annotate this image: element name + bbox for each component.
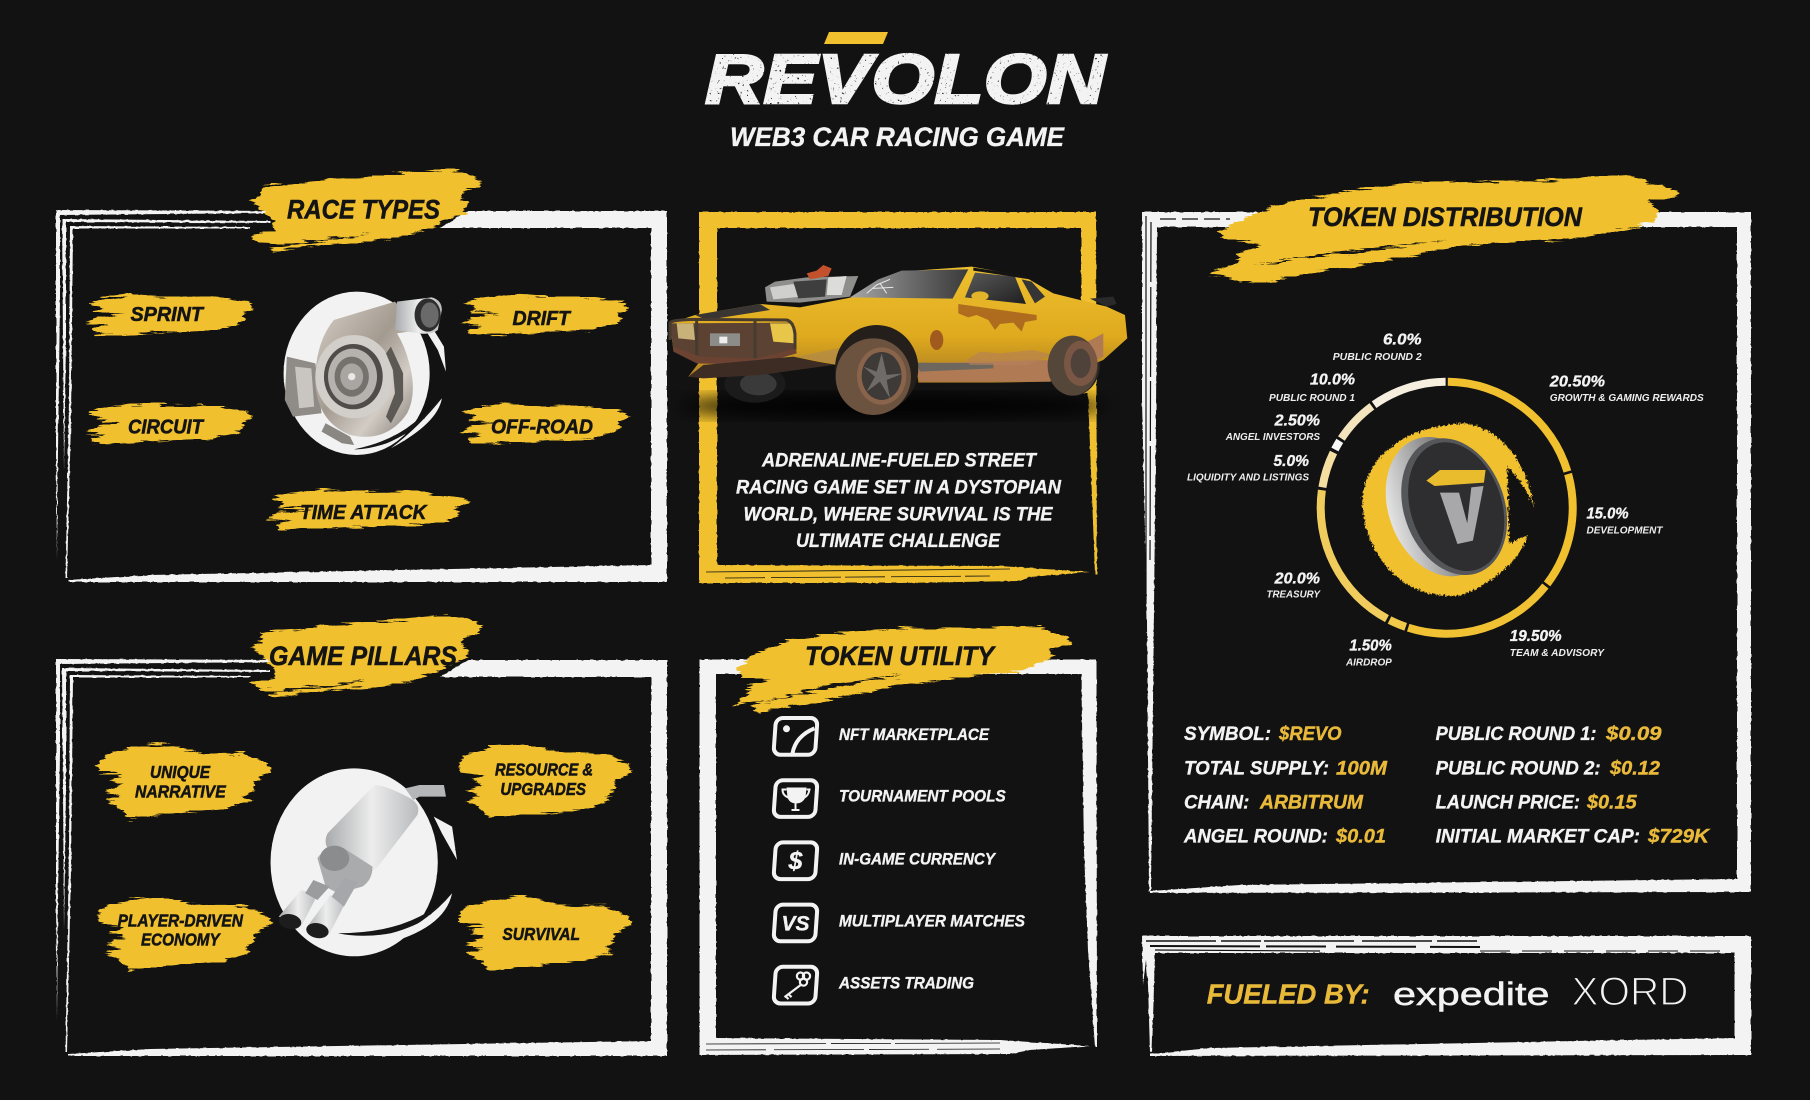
panel: game overview with car <box>670 212 1127 583</box>
pillar: resource and upgrades: UPGRADES <box>500 779 586 799</box>
overview text: ULTIMATE CHALLENGE <box>796 530 1001 552</box>
stat: angel round: ANGEL ROUND: <box>1183 826 1328 848</box>
utility: assets trading: ASSETS TRADING <box>838 974 974 992</box>
stat: chain <box>1184 791 1364 813</box>
label: liquidity and listings: 5.0% <box>1274 453 1309 470</box>
overview text: WORLD, WHERE SURVIVAL IS THE <box>744 504 1053 526</box>
image: exhaust muffler <box>271 768 457 956</box>
logo: expedite: expedite <box>1393 976 1550 1012</box>
donut chart <box>1321 382 1573 634</box>
label: public round 1: PUBLIC ROUND 1 <box>1269 392 1355 404</box>
race types frame <box>56 210 667 582</box>
logo: xord: XORD <box>1572 970 1688 1014</box>
top frame scratches <box>1146 941 1730 951</box>
utility: in-game currency: IN-GAME CURRENCY <box>839 850 997 868</box>
token distribution frame <box>1142 212 1751 893</box>
item: drift <box>460 294 629 335</box>
header: logo and subtitle <box>705 32 1107 152</box>
panel: game pillars <box>56 614 667 1056</box>
item: circuit <box>84 403 253 444</box>
fueled by frame <box>1142 936 1751 1056</box>
pillar: player-driven economy: PLAYER-DRIVEN <box>118 911 243 931</box>
utility: assets trading <box>773 967 974 1004</box>
stat: launch price: $0.15 <box>1586 791 1638 813</box>
item: drift: DRIFT <box>512 308 572 330</box>
utility: multiplayer matches <box>773 905 1025 941</box>
pillar: player-driven economy <box>97 896 271 970</box>
label: public round 2: PUBLIC ROUND 2 <box>1333 351 1422 363</box>
label: development: 15.0% <box>1586 505 1629 522</box>
item: off-road <box>460 403 629 444</box>
coin illustration <box>1362 423 1534 596</box>
icon: versus <box>773 905 818 941</box>
panel: token utility <box>700 627 1097 1055</box>
pillar: player-driven economy: ECONOMY <box>141 930 221 950</box>
game pillars heading brush <box>250 614 483 698</box>
stat: public round 2: $0.12 <box>1609 757 1660 779</box>
item: time attack <box>266 489 469 530</box>
stat: chain: ARBITRUM <box>1259 791 1364 813</box>
stat: public round 1: PUBLIC ROUND 1: <box>1436 723 1596 745</box>
stat: total supply: 100M <box>1336 757 1388 779</box>
stat: symbol: $REVO <box>1278 723 1342 745</box>
overview text <box>736 450 1062 552</box>
label: team and advisory <box>1510 628 1605 659</box>
label: treasury: TREASURY <box>1266 589 1321 601</box>
token utility frame <box>700 660 1097 1055</box>
panel: token distribution <box>1142 175 1751 893</box>
label: public round 1 <box>1269 372 1355 404</box>
logo accent bar <box>824 32 888 44</box>
label: public round 2 <box>1333 332 1422 363</box>
icon: versus: VS <box>781 912 810 935</box>
image: turbocharger <box>284 292 446 455</box>
pillar: resource and upgrades: RESOURCE & <box>495 760 593 780</box>
game pillars heading: GAME PILLARS <box>269 641 457 671</box>
donut labels <box>1187 332 1704 669</box>
label: angel investors: ANGEL INVESTORS <box>1225 431 1320 443</box>
label: team and advisory: TEAM & ADVISORY <box>1510 647 1605 659</box>
utility: nft marketplace: NFT MARKETPLACE <box>839 726 990 744</box>
yellow frame <box>699 212 1097 583</box>
race types heading brush <box>250 168 483 252</box>
label: liquidity and listings <box>1187 453 1309 484</box>
label: development <box>1586 505 1664 536</box>
car shadow <box>678 393 1108 419</box>
label: growth and gaming rewards <box>1549 374 1704 404</box>
label: development: DEVELOPMENT <box>1586 524 1664 536</box>
stat: chain: CHAIN: <box>1184 791 1249 813</box>
bottom frame scratches <box>706 1043 1000 1050</box>
pillar: unique narrative: NARRATIVE <box>135 782 227 802</box>
subtitle: WEB3 CAR RACING GAME <box>730 122 1065 152</box>
stat: initial market cap: INITIAL MARKET CAP: <box>1436 826 1640 848</box>
icon: dollar <box>773 842 818 879</box>
pillar: survival: SURVIVAL <box>502 924 580 944</box>
overview text: ADRENALINE-FUELED STREET <box>761 450 1038 472</box>
left frame scratches <box>1146 216 1230 600</box>
item: sprint: SPRINT <box>130 304 205 326</box>
label: airdrop <box>1345 638 1393 669</box>
stat: launch price: LAUNCH PRICE: <box>1436 791 1580 813</box>
label: airdrop: 1.50% <box>1349 638 1392 655</box>
label: growth and gaming rewards: GROWTH & GAMING REWARDS <box>1550 392 1704 404</box>
icon: dollar: $ <box>788 848 804 876</box>
panel: race types <box>56 168 667 582</box>
game pillars frame <box>56 659 667 1056</box>
label: liquidity and listings: LIQUIDITY AND LISTINGS <box>1187 472 1309 484</box>
utility: nft marketplace <box>773 718 990 755</box>
utility: multiplayer matches: MULTIPLAYER MATCHES <box>839 913 1025 931</box>
token utility heading: TOKEN UTILITY <box>805 641 997 671</box>
utility: in-game currency <box>773 842 997 879</box>
stat: initial market cap: $729K <box>1647 826 1711 848</box>
logo wordmark: REVOLON <box>705 40 1107 118</box>
label: angel investors: 2.50% <box>1274 413 1320 430</box>
label: growth and gaming rewards: 20.50% <box>1549 374 1605 391</box>
icon: image <box>773 718 818 755</box>
panel: fueled by <box>1142 936 1751 1056</box>
fueled by heading: FUELED BY: <box>1207 978 1370 1009</box>
token utility heading brush <box>732 627 1072 712</box>
label: public round 2: 6.0% <box>1383 332 1422 348</box>
label: airdrop: AIRDROP <box>1345 657 1393 669</box>
pillar: resource and upgrades <box>458 744 632 818</box>
icon: trophy <box>773 780 818 817</box>
bottom frame scratches <box>706 569 1010 578</box>
stat: angel round: $0.01 <box>1335 826 1386 848</box>
utility: tournament pools <box>773 780 1006 817</box>
stat: public round 2: PUBLIC ROUND 2: <box>1436 757 1601 779</box>
label: angel investors <box>1225 413 1320 443</box>
item: time attack: TIME ATTACK <box>300 502 428 524</box>
token distribution heading: TOKEN DISTRIBUTION <box>1308 202 1582 232</box>
pillar: survival <box>458 896 632 970</box>
stat: symbol: SYMBOL: <box>1184 723 1271 745</box>
label: public round 1: 10.0% <box>1310 372 1355 388</box>
item: sprint <box>85 294 254 335</box>
label: treasury: 20.0% <box>1274 570 1320 587</box>
item: circuit: CIRCUIT <box>128 416 205 438</box>
icon: key <box>773 967 818 1004</box>
stat: public round 1: $0.09 <box>1605 723 1662 745</box>
overview text: RACING GAME SET IN A DYSTOPIAN <box>736 476 1062 498</box>
image: yellow rusted muscle car <box>670 265 1127 415</box>
label: team and advisory: 19.50% <box>1510 628 1562 645</box>
token stats <box>1183 723 1711 848</box>
utility: tournament pools: TOURNAMENT POOLS <box>839 788 1006 806</box>
pillar: unique narrative <box>97 744 271 818</box>
race types heading: RACE TYPES <box>287 194 440 224</box>
stat: symbol <box>1184 723 1342 745</box>
label: treasury <box>1266 570 1321 601</box>
token distribution heading brush <box>1209 175 1679 283</box>
stat: total supply: TOTAL SUPPLY: <box>1184 757 1329 779</box>
item: off-road: OFF-ROAD <box>491 416 593 438</box>
pillar: unique narrative: UNIQUE <box>150 762 211 782</box>
